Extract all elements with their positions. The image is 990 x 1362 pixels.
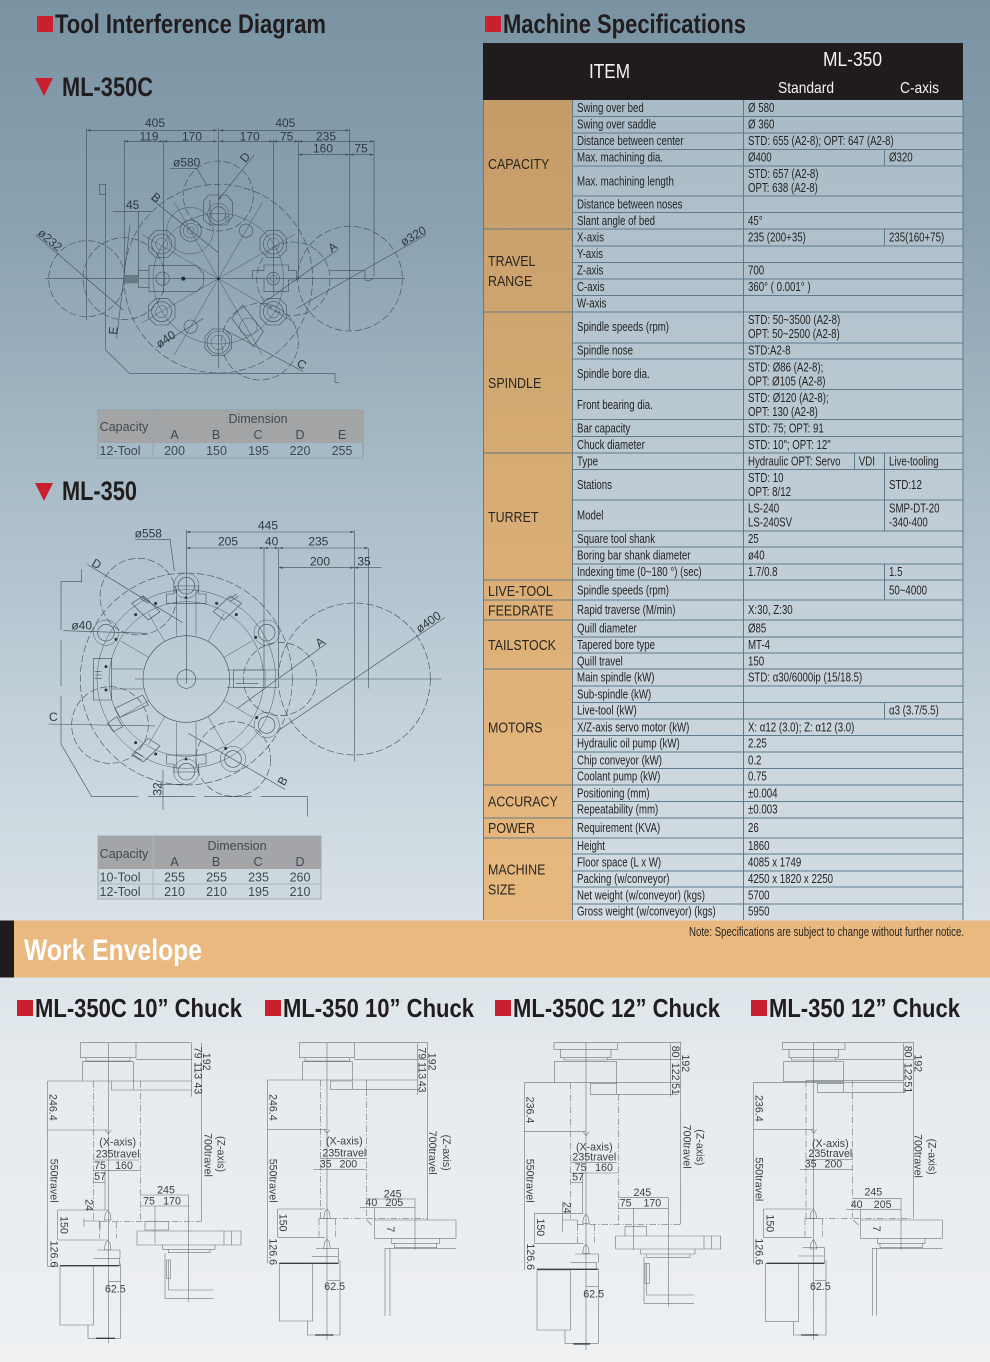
- diagram: ML-350C 10 inch work envelope: 700travel: [201, 1133, 213, 1177]
- diagram: ML-350 10 inch work envelope: 113: [416, 1062, 428, 1079]
- diagram: ML-350C 10 inch work envelope: 24: [82, 1199, 94, 1211]
- table: ML-350C capacity dimensions: Dimension: [228, 412, 288, 426]
- diagram: ML-350 tool interference: C: [49, 710, 58, 724]
- row item names: Quill travel: [577, 655, 623, 669]
- diagram: ML-350C tool interference: D: [237, 149, 253, 165]
- heading: ML-350 12 inch chuck: ML-350 12” Chuck: [769, 993, 960, 1023]
- section labels: MOTORS: [488, 719, 542, 736]
- subheading: ML-350C: [35, 72, 153, 102]
- subheading: ML-350: [35, 476, 137, 506]
- diagram: ML-350 12 inch work envelope: 7: [870, 1226, 882, 1232]
- table header: C-axis: [900, 80, 939, 97]
- standard column values: ±0.003: [748, 804, 778, 817]
- diagram: ML-350 tool interference: ø558: [135, 526, 162, 540]
- table: ML-350 capacity dimensions: Capacity: [100, 847, 149, 861]
- C-axis column values: STD:12: [889, 479, 922, 492]
- diagram: ML-350C 10 inch work envelope: 550travel: [47, 1159, 59, 1203]
- diagram: ML-350 12 inch work envelope: 245: [864, 1187, 882, 1199]
- row item names: Packing (w/conveyor): [577, 873, 670, 886]
- standard column values: 45°: [748, 215, 763, 228]
- diagram: ML-350 12 inch work envelope: 550travel: [753, 1157, 765, 1201]
- table: ML-350C capacity dimensions: [98, 410, 363, 458]
- standard column values: OPT: 638 (A2-8): [748, 182, 818, 195]
- diagram: ML-350 10 inch work envelope: 40: [365, 1197, 377, 1209]
- diagram: ML-350 tool interference: 205: [218, 535, 238, 549]
- standard column values: Ø85: [748, 622, 766, 636]
- diagram: ML-350C 12 inch work envelope: 236.4: [523, 1097, 535, 1123]
- diagram: ML-350C tool interference: 160: [313, 142, 333, 156]
- row item names: Max. machining dia.: [577, 151, 663, 165]
- diagram: ML-350 tool interference: 35: [357, 554, 371, 568]
- diagram: ML-350C 10 inch work envelope: 150: [57, 1216, 69, 1234]
- standard column values: OPT: 50~2500 (A2-8): [748, 328, 840, 341]
- diagram: ML-350 10 inch work envelope: 126.6: [267, 1238, 279, 1265]
- section labels: POWER: [488, 820, 535, 836]
- standard column values: STD:A2-8: [748, 345, 790, 358]
- standard column values: 1860: [748, 840, 770, 853]
- row item names: Floor space (L x W): [577, 856, 661, 870]
- diagram: ML-350C 10 inch work envelope: 160: [115, 1160, 133, 1172]
- standard column values: STD: 657 (A2-8): [748, 168, 819, 181]
- row item names: Coolant pump (kW): [577, 771, 661, 784]
- diagram: ML-350C 12 inch work envelope: (Z-axis): [693, 1129, 705, 1165]
- diagram: ML-350 12 inch work envelope: 35: [805, 1158, 817, 1170]
- diagram: ML-350 10 inch work envelope: 246.4: [267, 1094, 279, 1121]
- standard column values: LS-240SV: [748, 517, 793, 530]
- standard column values: STD: Ø86 (A2-8);: [748, 362, 823, 375]
- diagram: ML-350C 10 inch work envelope: 62.5: [105, 1283, 126, 1295]
- row item names: X-axis: [577, 231, 604, 245]
- table header: Standard: [778, 80, 834, 97]
- subheading: ML-350C: ML-350C: [62, 72, 153, 102]
- C-axis column values: Live-tooling: [889, 456, 939, 469]
- diagram: ML-350 tool interference: 235: [308, 535, 329, 549]
- standard column values: Ø 360: [748, 118, 774, 132]
- diagram: ML-350 12 inch work envelope: 235travel: [808, 1148, 852, 1160]
- diagram: ML-350C 10 inch work envelope: 75: [143, 1195, 155, 1207]
- row item names: [577, 102, 716, 919]
- row item names: Spindle speeds (rpm): [577, 584, 669, 598]
- C-axis column values: SMP-DT-20: [889, 503, 940, 516]
- section labels: [488, 156, 558, 898]
- row item names: Spindle nose: [577, 345, 633, 358]
- diagram: ML-350 10 inch work envelope: (Z-axis): [440, 1135, 452, 1171]
- diagram: ML-350 10 inch work envelope: 700travel: [426, 1131, 438, 1175]
- table: ML-350C capacity dimensions: C: [253, 428, 263, 442]
- diagram: ML-350C tool interference: ø320: [398, 223, 429, 249]
- diagram: ML-350 12 inch work envelope: [753, 1043, 942, 1340]
- standard column values: 26: [748, 822, 759, 835]
- diagram: ML-350C 10 inch work envelope: 170: [163, 1195, 181, 1207]
- diagram: ML-350 tool interference: [48, 519, 445, 817]
- diagram: ML-350 tool interference: ø400: [413, 608, 444, 636]
- row item names: Sub-spindle (kW): [577, 688, 651, 702]
- table: ML-350C capacity dimensions: 195: [248, 444, 269, 458]
- diagram: ML-350C 10 inch work envelope: 79: [191, 1047, 203, 1059]
- standard column values: STD: 10"; OPT: 12": [748, 439, 831, 452]
- row item names: Main spindle (kW): [577, 672, 655, 685]
- table: ML-350C capacity dimensions: E: [338, 428, 346, 442]
- diagram: ML-350C 12 inch work envelope: 57: [572, 1171, 584, 1183]
- diagram: ML-350C 12 inch work envelope: [523, 1043, 721, 1350]
- diagram: ML-350 12 inch work envelope: 150: [763, 1214, 775, 1232]
- table body grid: [484, 100, 963, 920]
- diagram: ML-350C tool interference: 405: [275, 116, 296, 130]
- diagram: ML-350 tool interference: D: [89, 556, 104, 572]
- C-axis column values: 1.5: [889, 566, 902, 579]
- table: ML-350C capacity dimensions: A: [170, 428, 179, 442]
- row item names: Model: [577, 510, 603, 523]
- diagram: ML-350 tool interference: A: [313, 634, 327, 650]
- row item names: X/Z-axis servo motor (kW): [577, 721, 690, 735]
- diagram: ML-350C 12 inch work envelope: 126.6: [524, 1243, 536, 1270]
- standard column values: LS-240: [748, 503, 779, 516]
- diagram: ML-350 12 inch work envelope: (Z-axis): [926, 1139, 938, 1175]
- row item names: C-axis: [577, 281, 605, 294]
- table: ML-350C capacity dimensions: 150: [206, 444, 227, 458]
- heading: ML-350C 12 inch chuck: ML-350C 12” Chuck: [513, 993, 720, 1023]
- C-axis column values: 50~4000: [889, 584, 927, 598]
- diagram: ML-350 10 inch work envelope: 7: [384, 1226, 396, 1232]
- standard column values: ø40: [748, 550, 765, 563]
- table: ML-350C capacity dimensions: D: [295, 428, 305, 442]
- standard column values: VDI: [859, 456, 875, 469]
- table: ML-350 capacity dimensions: A: [170, 855, 179, 869]
- diagram: ML-350C 12 inch work envelope: 170: [643, 1198, 661, 1210]
- row item names: Front bearing dia.: [577, 399, 653, 412]
- row item names: Chip conveyor (kW): [577, 754, 662, 768]
- row item names: Gross weight (w/conveyor) (kgs): [577, 906, 716, 919]
- row item names: Square tool shank: [577, 533, 655, 546]
- standard column values: Hydraulic OPT: Servo: [748, 456, 840, 469]
- table: ML-350 capacity dimensions: 12-Tool: [100, 885, 140, 899]
- banner: Work Envelope: Work Envelope: [24, 934, 202, 967]
- standard column values: 150: [748, 655, 764, 669]
- standard column values: STD: 655 (A2-8); OPT: 647 (A2-8): [748, 135, 894, 148]
- row item names: Net weight (w/conveyor) (kgs): [577, 889, 705, 903]
- row item names: Quill diameter: [577, 622, 637, 636]
- standard column values: X: α12 (3.0); Z: α12 (3.0): [748, 721, 855, 735]
- C-axis column values: Ø320: [889, 151, 913, 165]
- C-axis column values: α3 (3.7/5.5): [889, 705, 939, 718]
- table: machine specifications: [483, 43, 963, 920]
- standard column values: OPT: 8/12: [748, 486, 791, 499]
- diagram: ML-350C tool interference: ø580: [173, 155, 201, 169]
- table: ML-350 capacity dimensions: Dimension: [207, 839, 267, 853]
- row item names: Max. machining length: [577, 175, 674, 189]
- table: ML-350 capacity dimensions: 195: [248, 885, 269, 899]
- diagram: ML-350 10 inch work envelope: 35: [320, 1158, 332, 1170]
- table: ML-350 capacity dimensions: 235: [248, 870, 269, 884]
- section labels: CAPACITY: [488, 156, 549, 172]
- table: ML-350C capacity dimensions: 255: [332, 444, 352, 458]
- diagram: ML-350C 10 inch work envelope: [47, 1043, 241, 1343]
- diagram: ML-350 10 inch work envelope: 245: [384, 1188, 402, 1200]
- standard column values: 25: [748, 533, 759, 546]
- diagram: ML-350C 10 inch work envelope: 235travel: [96, 1149, 140, 1161]
- diagram: ML-350C 12 inch work envelope: 245: [633, 1187, 651, 1199]
- row item names: Slant angle of bed: [577, 215, 655, 228]
- diagram: ML-350 10 inch work envelope: 192: [426, 1053, 438, 1071]
- standard column values: OPT: 130 (A2-8): [748, 406, 818, 419]
- heading: Tool Interference Diagram: Tool Interference Diagram: [55, 9, 326, 39]
- row item names: Repeatability (mm): [577, 804, 658, 817]
- table: ML-350C capacity dimensions: 200: [164, 444, 185, 458]
- row item names: Height: [577, 840, 606, 853]
- standard column values: STD: α30/6000ip (15/18.5): [748, 672, 862, 685]
- standard column values: 0.2: [748, 754, 761, 768]
- C-axis column values: 235(160+75): [889, 231, 944, 245]
- diagram: ML-350 12 inch work envelope: 40: [851, 1199, 863, 1211]
- enclosure wall: [99, 184, 339, 382]
- diagram: ML-350 10 inch work envelope: 43: [416, 1081, 428, 1093]
- standard column values: ±0.004: [748, 787, 778, 801]
- diagram: ML-350C tool interference: ø40: [153, 327, 178, 351]
- table: ML-350C capacity dimensions: B: [212, 428, 220, 442]
- row item names: Spindle speeds (rpm): [577, 321, 669, 334]
- diagram: ML-350C 10 inch work envelope: 43: [191, 1082, 203, 1094]
- section labels: TRAVEL: [488, 253, 536, 269]
- row item names: Swing over bed: [577, 102, 644, 115]
- row item names: Type: [577, 456, 598, 469]
- section labels: SIZE: [488, 881, 516, 898]
- diagram: ML-350 12 inch work envelope: 200: [824, 1158, 842, 1170]
- diagram: ML-350C tool interference: 45: [126, 198, 140, 212]
- diagram: ML-350C tool interference: ø232: [35, 226, 65, 254]
- section labels: RANGE: [488, 273, 532, 289]
- diagram: ML-350C 12 inch work envelope: 150: [534, 1218, 546, 1236]
- row item names: Rapid traverse (M/min): [577, 604, 676, 617]
- diagram: ML-350 12 inch work envelope: (X-axis): [812, 1138, 849, 1150]
- section labels: MACHINE: [488, 861, 545, 878]
- diagram: ML-350C 10 inch work envelope: 192: [200, 1053, 212, 1071]
- diagram: ML-350C 10 inch work envelope: 245: [157, 1185, 175, 1197]
- C-axis column values: [889, 151, 944, 718]
- table: ML-350 capacity dimensions: 260: [290, 870, 310, 884]
- diagram: ML-350 10 inch work envelope: [267, 1043, 456, 1340]
- standard column values: Ø 580: [748, 102, 774, 115]
- diagram: ML-350 12 inch work envelope: 80: [902, 1046, 914, 1058]
- standard column values: 235 (200+35): [748, 231, 806, 245]
- diagram: ML-350C 10 inch work envelope: 75: [94, 1160, 106, 1172]
- tool stations: [124, 195, 374, 356]
- standard column values: [748, 102, 894, 919]
- row item names: Positioning (mm): [577, 787, 650, 801]
- diagram: ML-350 tool interference: 40: [265, 535, 279, 549]
- standard column values: STD: 10: [748, 472, 783, 485]
- diagram: ML-350C tool interference: 75: [354, 142, 368, 156]
- table: ML-350C capacity dimensions: 12-Tool: [100, 444, 140, 458]
- diagram: ML-350C tool interference: [35, 116, 429, 382]
- row item names: Tapered bore type: [577, 639, 655, 652]
- diagram: ML-350C 10 inch work envelope: (X-axis): [99, 1137, 136, 1149]
- row item names: Stations: [577, 479, 612, 492]
- row item names: Z-axis: [577, 264, 604, 278]
- diagram: ML-350C tool interference: E: [106, 326, 121, 335]
- row item names: Bar capacity: [577, 423, 631, 436]
- standard column values: STD: 50~3500 (A2-8): [748, 314, 840, 327]
- diagram: ML-350C 12 inch work envelope: 24: [561, 1202, 573, 1214]
- standard column values: 360° ( 0.001° ): [748, 281, 811, 294]
- table header: ITEM: [589, 61, 630, 83]
- standard column values: 2.25: [748, 738, 767, 751]
- diagram: ML-350C tool interference: 170: [182, 129, 202, 143]
- diagram: ML-350C 12 inch work envelope: 192: [679, 1054, 691, 1072]
- row item names: Boring bar shank diameter: [577, 550, 691, 563]
- diagram: ML-350 12 inch work envelope: 122: [902, 1063, 914, 1081]
- diagram: ML-350C tool interference: 170: [240, 129, 260, 143]
- row item names: Requirement (KVA): [577, 822, 660, 835]
- standard column values: 0.75: [748, 771, 767, 784]
- diagram: ML-350C 10 inch work envelope: 57: [94, 1171, 106, 1183]
- table: ML-350 capacity dimensions: 255: [164, 870, 185, 884]
- standard column values: 5950: [748, 906, 770, 919]
- row item names: Live-tool (kW): [577, 705, 637, 718]
- table: ML-350 capacity dimensions: 210: [206, 885, 227, 899]
- diagram: ML-350C tool interference: B: [148, 190, 164, 206]
- diagram: ML-350C 12 inch work envelope: 75: [575, 1162, 587, 1174]
- turret segments and tools: [93, 573, 279, 784]
- table: ML-350 capacity dimensions: B: [212, 855, 220, 869]
- table: ML-350C capacity dimensions: 220: [290, 444, 310, 458]
- diagram: ML-350 10 inch work envelope: 205: [385, 1197, 403, 1209]
- diagram: ML-350 10 inch work envelope: 550travel: [267, 1159, 279, 1203]
- diagram: ML-350 10 inch work envelope: 150: [277, 1214, 289, 1232]
- table: ML-350 capacity dimensions: 210: [290, 885, 310, 899]
- dimension lines and leaders: [218, 155, 254, 200]
- banner: Work Envelope: [0, 920, 990, 978]
- diagram: ML-350 12 inch work envelope: 126.6: [753, 1238, 765, 1265]
- diagram: ML-350 12 inch work envelope: 700travel: [912, 1134, 924, 1178]
- diagram: ML-350 tool interference: ø40: [71, 618, 92, 632]
- heading: ML-350 10 inch chuck: ML-350 10” Chuck: [283, 993, 474, 1023]
- heading: Machine Specifications: Machine Specifications: [503, 9, 746, 39]
- table: ML-350 capacity dimensions: D: [295, 855, 305, 869]
- row item names: Distance between noses: [577, 198, 683, 212]
- diagram: ML-350 10 inch work envelope: 62.5: [324, 1281, 345, 1293]
- diagram: ML-350C 12 inch work envelope: 160: [595, 1162, 613, 1174]
- row item names: Hydraulic oil pump (kW): [577, 738, 680, 751]
- row item names: Spindle bore dia.: [577, 368, 650, 381]
- diagram: ML-350 12 inch work envelope: 205: [874, 1199, 892, 1211]
- diagram: ML-350C 12 inch work envelope: 700travel: [681, 1125, 693, 1169]
- table: ML-350 capacity dimensions: C: [253, 855, 263, 869]
- diagram: ML-350 12 inch work envelope: 51: [902, 1081, 914, 1093]
- row item names: W-axis: [577, 297, 607, 311]
- table header: [483, 43, 963, 100]
- standard column values: X:30, Z:30: [748, 604, 793, 617]
- diagram: ML-350C 10 inch work envelope: 246.4: [47, 1094, 59, 1121]
- diagram: ML-350C tool interference: 405: [145, 116, 165, 130]
- diagram: ML-350C 12 inch work envelope: 75: [620, 1198, 632, 1210]
- diagram: ML-350 10 inch work envelope: 235travel: [322, 1147, 366, 1159]
- section labels: TURRET: [488, 509, 539, 525]
- diagram: ML-350 tool interference: 32: [150, 782, 164, 796]
- diagram: ML-350C tool interference: 235: [316, 129, 336, 143]
- diagram: ML-350 12 inch work envelope: 236.4: [753, 1095, 765, 1122]
- standard column values: Ø400: [748, 151, 772, 165]
- enclosure wall: [61, 569, 307, 817]
- section labels: FEEDRATE: [488, 602, 553, 619]
- row item names: Y-axis: [577, 248, 603, 261]
- diagram: ML-350C tool interference: 119: [139, 129, 159, 143]
- C-axis column values: -340-400: [889, 517, 928, 530]
- diagram: ML-350 10 inch work envelope: (X-axis): [326, 1136, 363, 1148]
- standard column values: 1.7/0.8: [748, 566, 778, 579]
- row item names: Indexing time (0~180 °) (sec): [577, 566, 702, 579]
- diagram: ML-350C tool interference: C: [294, 356, 309, 373]
- diagram: ML-350 tool interference: B: [275, 774, 291, 788]
- diagram: ML-350 tool interference: 445: [258, 519, 278, 533]
- table: ML-350C capacity dimensions: Capacity: [100, 420, 149, 434]
- row item names: Chuck diameter: [577, 439, 645, 452]
- section labels: LIVE-TOOL: [488, 583, 553, 599]
- standard column values: 5700: [748, 889, 770, 903]
- diagram: ML-350C 12 inch work envelope: 235travel: [572, 1151, 616, 1163]
- row item names: Swing over saddle: [577, 118, 656, 132]
- diagram: ML-350 12 inch work envelope: 62.5: [810, 1281, 831, 1293]
- diagram: ML-350C tool interference: 75: [280, 129, 294, 143]
- standard column values: 700: [748, 264, 764, 278]
- table: ML-350 capacity dimensions: [98, 836, 321, 899]
- standard column values: 4250 x 1820 x 2250: [748, 873, 833, 886]
- standard column values: STD: Ø120 (A2-8);: [748, 392, 829, 405]
- diagram: ML-350C 12 inch work envelope: 51: [669, 1083, 681, 1095]
- diagram: ML-350C 10 inch work envelope: 126.6: [47, 1241, 59, 1267]
- diagram: ML-350 12 inch work envelope: 192: [912, 1054, 924, 1072]
- standard column values: OPT: Ø105 (A2-8): [748, 376, 826, 389]
- table: ML-350 capacity dimensions: 210: [164, 885, 185, 899]
- table header: ML-350: [823, 49, 882, 71]
- section labels: TAILSTOCK: [488, 637, 557, 653]
- standard column values: STD: 75; OPT: 91: [748, 423, 824, 436]
- heading: ML-350C 10 inch chuck: ML-350C 10” Chuck: [35, 993, 242, 1023]
- diagram: ML-350C 10 inch work envelope: 113: [191, 1062, 203, 1079]
- subheading: ML-350: ML-350: [62, 476, 137, 506]
- section labels: ACCURACY: [488, 793, 558, 810]
- dimension lines and leaders: [48, 539, 445, 810]
- table: ML-350 capacity dimensions: 255: [206, 870, 227, 884]
- diagram: ML-350C 10 inch work envelope: (Z-axis): [215, 1136, 227, 1172]
- diagram: ML-350C 12 inch work envelope: 62.5: [583, 1289, 604, 1301]
- table: ML-350 capacity dimensions: 10-Tool: [100, 870, 140, 884]
- row item names: Distance between center: [577, 135, 684, 148]
- section labels: SPINDLE: [488, 375, 541, 391]
- standard column values: MT-4: [748, 639, 770, 652]
- diagram: ML-350 10 inch work envelope: 79: [416, 1047, 428, 1059]
- diagram: ML-350C 12 inch work envelope: 80: [669, 1046, 681, 1058]
- standard column values: 4085 x 1749: [748, 856, 801, 870]
- diagram: ML-350C 12 inch work envelope: 122: [669, 1063, 681, 1081]
- diagram: ML-350C 12 inch work envelope: 550travel: [523, 1159, 535, 1203]
- diagram: ML-350 tool interference: 200: [310, 554, 330, 568]
- diagram: ML-350 10 inch work envelope: 200: [339, 1158, 357, 1170]
- diagram: ML-350C tool interference: A: [325, 239, 340, 255]
- diagram: ML-350C 12 inch work envelope: (X-axis): [576, 1141, 613, 1153]
